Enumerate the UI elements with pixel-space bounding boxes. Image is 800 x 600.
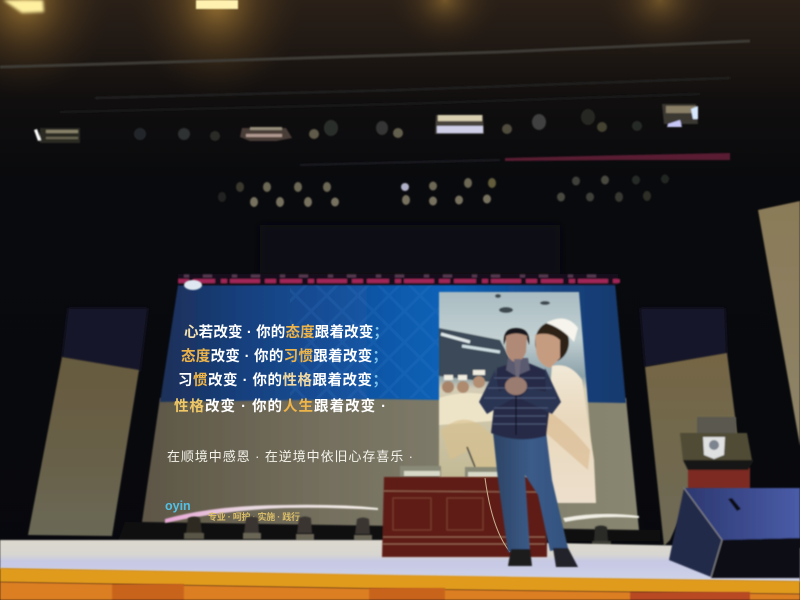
- ceiling lights with glow: [0, 0, 720, 100]
- speaker handle: [728, 498, 741, 511]
- hair: [504, 328, 529, 345]
- jeans: [493, 432, 568, 552]
- right wing: tan lit panel: [645, 353, 745, 546]
- jacket stripes: [484, 378, 556, 424]
- speaker person: [479, 328, 578, 567]
- nurse photo on screen: [439, 292, 596, 503]
- line 3: 习惯改变 · 你的性格跟着改变；: [178, 371, 387, 389]
- right shoe: [553, 548, 578, 567]
- wooden table: [382, 477, 547, 557]
- face: [506, 334, 527, 362]
- projection screen: [142, 274, 639, 530]
- white spot at screen top: [184, 280, 202, 290]
- red strip: [505, 153, 730, 161]
- jacket arm right: [520, 368, 561, 414]
- dark hall band: [439, 328, 520, 382]
- microphone cable: [485, 478, 510, 552]
- screen frame base: [118, 522, 660, 541]
- valance fringe: [178, 274, 620, 285]
- logo: oyin: [165, 499, 191, 513]
- orange stage edge: [0, 568, 800, 594]
- lectern top: [680, 433, 752, 460]
- line 1: 心若改变 · 你的态度跟着改变；: [184, 323, 388, 341]
- top row spot lamps: [134, 109, 642, 141]
- swoosh right segment: [563, 514, 639, 522]
- laptops on table: [400, 447, 500, 477]
- orange stage front: [0, 582, 800, 600]
- ceiling lamps: [495, 294, 550, 313]
- slogan: 专业 · 呵护 · 实施 · 践行: [208, 511, 300, 522]
- lectern dark band: [683, 460, 754, 470]
- lower rows of spot lamps: [218, 174, 669, 207]
- left wing: tan lit panel: [28, 357, 139, 536]
- main nurse cap: [546, 319, 578, 342]
- speaker side: [669, 488, 722, 577]
- dark blue curtain behind screen top: [260, 225, 560, 275]
- lectern laptop: [697, 417, 736, 433]
- speaker front: [711, 538, 800, 578]
- far right tan panel: [758, 201, 800, 446]
- right wing: dark upper drape: [640, 308, 727, 367]
- jacket torso: [491, 362, 551, 439]
- screen: diamond texture: [290, 285, 439, 398]
- photo background: [439, 292, 596, 503]
- table panels: [393, 498, 483, 530]
- line 5: 在顺境中感恩 · 在逆境中依旧心存喜乐 ·: [167, 449, 413, 464]
- neck and collar: [506, 358, 530, 376]
- microphone: [514, 359, 521, 378]
- screen: tan lower zone: [142, 398, 639, 530]
- right lectern: [680, 417, 754, 492]
- lectern red base: [688, 468, 750, 492]
- nurse crowd: [439, 370, 505, 503]
- large stage fixtures: [34, 104, 698, 143]
- slide text: [167, 323, 413, 464]
- lectern badge: [703, 437, 725, 459]
- speaker top: [684, 488, 800, 540]
- main nurse hair: [535, 322, 569, 362]
- jacket arm left: [479, 370, 520, 414]
- screen: blue upper zone: [160, 283, 626, 403]
- stage monitor speaker: [669, 488, 800, 578]
- line 2: 态度改变 · 你的习惯跟着改变；: [181, 347, 387, 365]
- main nurse face: [535, 334, 560, 368]
- left wing: dark upper drape: [62, 308, 148, 372]
- hands: [505, 377, 527, 395]
- rigging beams: [0, 41, 750, 165]
- left shoe: [508, 549, 532, 566]
- stage floor: [0, 540, 800, 582]
- line 4: 性格改变 · 你的人生跟着改变 ·: [174, 397, 386, 415]
- main nurse uniform: [545, 365, 596, 503]
- stage floor lights: [184, 516, 611, 546]
- swoosh line: [165, 505, 378, 523]
